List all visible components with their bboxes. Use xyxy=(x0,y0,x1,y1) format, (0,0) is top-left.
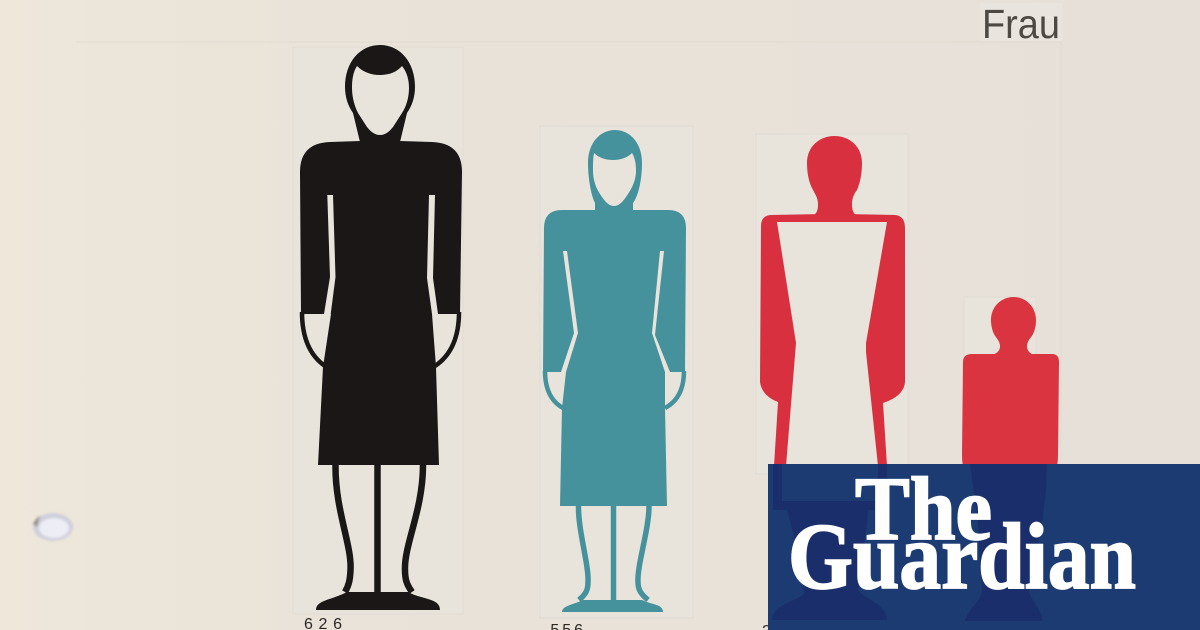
head xyxy=(991,297,1036,355)
red figure: small xyxy=(962,297,1059,470)
teal figure: woman 556 xyxy=(540,126,693,618)
legs xyxy=(335,465,423,594)
torso outline and arms xyxy=(760,214,905,466)
logo wordmark: Guardian xyxy=(788,505,1136,609)
punched hole xyxy=(33,513,73,541)
red figure: outline xyxy=(756,134,908,474)
hands xyxy=(302,312,459,366)
logo wordmark xyxy=(788,460,1136,609)
body xyxy=(962,354,1059,470)
feet xyxy=(316,592,440,610)
legs xyxy=(578,506,649,602)
dress and arms xyxy=(543,210,686,506)
dress and arms xyxy=(300,141,462,465)
logo wordmark: The xyxy=(855,460,992,559)
Guardian logo banner xyxy=(768,460,1200,630)
black figure: woman 626 xyxy=(293,45,463,614)
figure shadows under banner xyxy=(772,464,887,620)
feet xyxy=(562,600,663,612)
head xyxy=(807,136,862,216)
head with hair xyxy=(345,45,415,142)
hands xyxy=(545,371,684,408)
head with hair xyxy=(588,130,642,212)
label: Frau: Frau xyxy=(982,1,1060,47)
